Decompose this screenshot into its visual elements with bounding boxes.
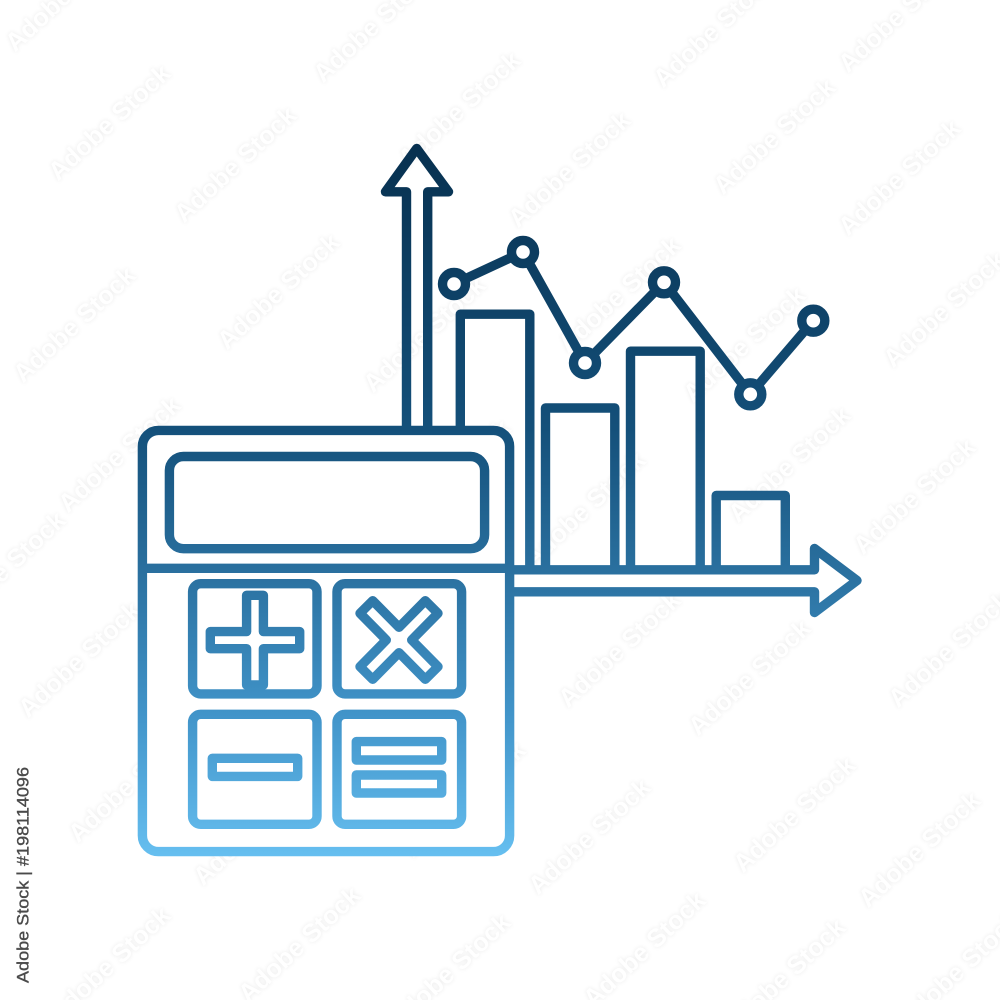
watermark pattern: Adobe Stock	[8, 261, 141, 388]
watermark pattern: Adobe Stock	[678, 281, 811, 408]
minus sign	[212, 758, 298, 776]
watermark pattern: Adobe Stock	[683, 614, 816, 741]
multiply sign	[360, 601, 438, 679]
watermark pattern: Adobe Stock	[848, 433, 981, 560]
watermark pattern: Adobe Stock	[723, 401, 856, 528]
watermark pattern: Adobe Stock	[553, 586, 686, 713]
point 6	[802, 309, 825, 332]
watermark pattern: Adobe Stock	[518, 446, 651, 573]
point 5	[739, 383, 762, 406]
watermark pattern: Adobe Stock	[708, 73, 841, 200]
watermark pattern: Adobe Stock	[358, 271, 491, 398]
arrow: horizontal axis	[510, 548, 857, 612]
bar 2	[546, 408, 615, 570]
watermark pattern: Adobe Stock	[833, 114, 966, 241]
watermark pattern: Adobe Stock	[53, 391, 186, 518]
chart	[386, 148, 857, 612]
side credit text: Adobe Stock | #198114096	[14, 767, 32, 983]
watermark pattern: Adobe Stock	[363, 601, 496, 728]
plus key frame	[193, 584, 317, 694]
watermark pattern: Adobe Stock	[398, 736, 531, 863]
equals key frame	[337, 714, 462, 824]
point 1	[442, 272, 466, 296]
arrow: vertical axis	[386, 148, 448, 430]
calculator display	[169, 456, 485, 549]
button: multiply	[337, 584, 462, 694]
watermark pattern: Adobe Stock	[393, 46, 526, 173]
watermark pattern: Adobe Stock	[43, 59, 176, 186]
bar 4	[716, 496, 785, 570]
watermark pattern: Adobe Stock	[178, 426, 311, 553]
bars	[460, 314, 785, 570]
minus key frame	[193, 714, 317, 824]
line chart	[442, 240, 825, 406]
watermark pattern: Adobe Stock	[523, 773, 656, 900]
equals bottom bar	[356, 775, 442, 793]
watermark pattern: Adobe Stock	[503, 106, 636, 233]
point 3	[574, 352, 596, 374]
calculator divider	[142, 564, 510, 573]
watermark pattern: Adobe Stock	[383, 414, 516, 541]
watermark pattern: Adobe Stock	[13, 596, 146, 723]
point 2	[512, 240, 534, 264]
button: equals	[337, 714, 462, 824]
plus sign	[210, 595, 300, 685]
watermark pattern: Adobe Stock	[853, 786, 986, 913]
watermark pattern: Adobe Stock	[169, 101, 302, 228]
point 4	[652, 271, 676, 294]
bar 3	[630, 351, 700, 570]
watermark pattern: Adobe Stock	[553, 231, 686, 358]
icon: calculator	[142, 430, 510, 852]
trend line	[454, 252, 813, 394]
watermark pattern: Adobe Stock	[223, 561, 356, 688]
equals top bar	[356, 742, 442, 760]
watermark pattern: Adobe Stock	[188, 764, 321, 891]
button: plus	[193, 584, 317, 694]
watermark pattern: Adobe Stock	[63, 721, 196, 848]
button: minus	[193, 714, 317, 824]
watermark pattern: Adobe Stock	[728, 751, 861, 878]
watermark pattern: Adobe Stock	[212, 228, 345, 355]
calculator body	[142, 430, 510, 852]
bar 1	[460, 314, 530, 570]
multiply key frame	[337, 584, 462, 694]
